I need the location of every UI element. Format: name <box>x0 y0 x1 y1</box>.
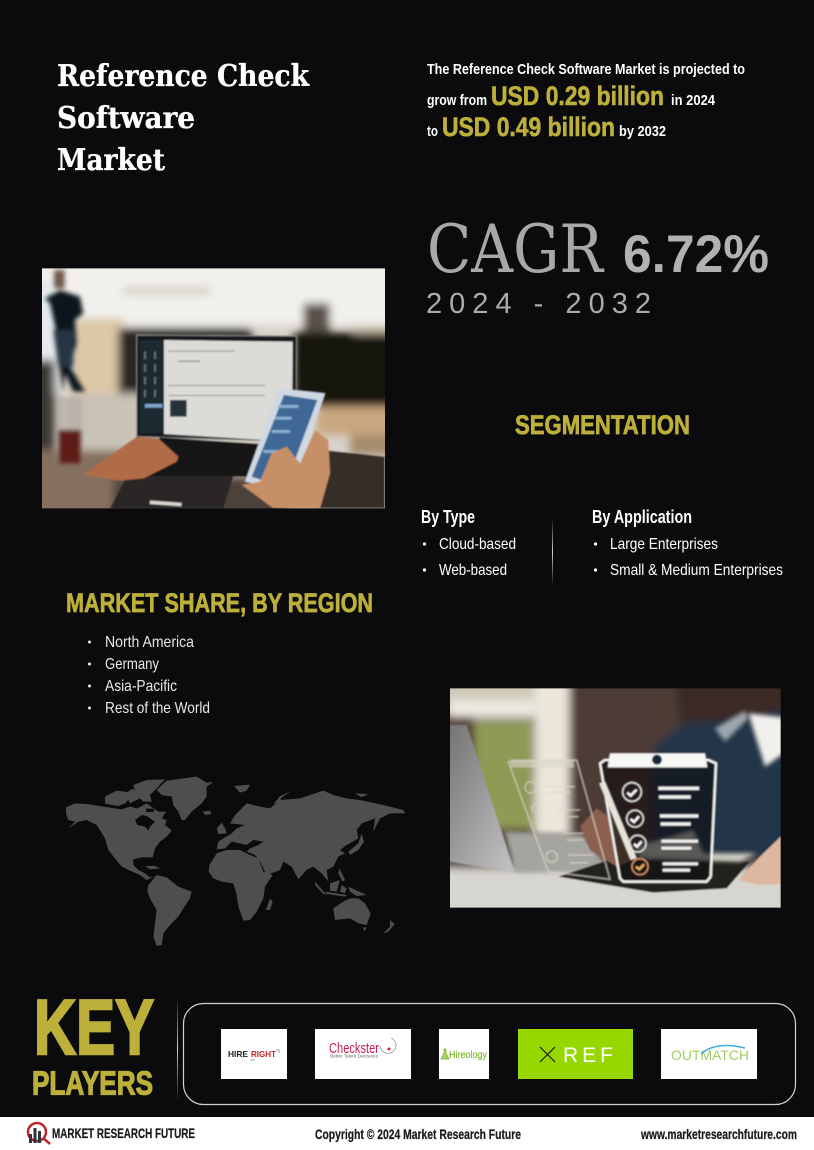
title: Market <box>57 143 165 178</box>
heading: key players: PLAYERS <box>32 1064 153 1102</box>
CAGR figure: 6.72% <box>623 225 769 284</box>
heading: segmentation: SEGMENTATION <box>515 410 690 440</box>
hand <box>580 808 633 867</box>
photo: digital checklist <box>450 688 781 908</box>
segmentation: by application: By Application <box>592 507 692 527</box>
intro text: market projection: grow from <box>427 92 487 109</box>
footer: MARKET RESEARCH FUTURE <box>52 1125 195 1141</box>
footer <box>0 1117 814 1150</box>
tablet under <box>558 858 750 893</box>
world map <box>66 777 405 946</box>
region list: North America <box>105 634 194 651</box>
intro text: market projection: in 2024 <box>671 92 716 109</box>
phone <box>245 388 325 488</box>
intro text: market projection: USD 0.29 billion <box>491 81 664 111</box>
CAGR figure <box>426 211 769 320</box>
logo: Checkster: Checkster <box>329 1040 379 1057</box>
segmentation: by application: Large Enterprises <box>610 536 718 553</box>
main clipboard <box>600 760 716 882</box>
title: Software <box>57 101 195 136</box>
CAGR figure: CAGR <box>427 211 605 288</box>
region list: Rest of the World <box>105 700 210 717</box>
intro text: market projection <box>427 61 745 142</box>
logo: XREF: REF <box>563 1044 613 1067</box>
segmentation: by type: Cloud-based <box>439 536 516 553</box>
laptop <box>450 724 514 871</box>
logo: HireRight: RIGHT <box>251 1049 277 1059</box>
segmentation: by application <box>592 507 783 579</box>
intro text: market projection: The Reference Check Software Market is projected to <box>427 61 745 78</box>
logo: Outmatch: OUTMATCH <box>671 1047 749 1063</box>
person <box>45 270 85 463</box>
title <box>57 59 310 178</box>
hand left <box>83 437 178 481</box>
footer: Copyright © 2024 Market Research Future <box>315 1126 521 1142</box>
region list: Germany <box>105 656 159 673</box>
logo: Hireology: Hireology <box>449 1049 488 1061</box>
laptop <box>137 335 297 442</box>
intro text: market projection: by 2032 <box>619 123 666 140</box>
logo: Outmatch <box>661 1029 757 1079</box>
CAGR figure: 2024 - 2032 <box>426 288 651 320</box>
region list <box>88 634 210 717</box>
logo: HireRight <box>221 1029 287 1079</box>
heading: key players: KEY <box>34 983 154 1071</box>
intro text: market projection: to <box>427 123 438 140</box>
segmentation: by type <box>421 507 516 579</box>
logo: Checkster: Better Talent Decisions <box>330 1054 379 1058</box>
logo: Checkster <box>315 1029 411 1079</box>
logo: HireRight: HIRE <box>228 1049 248 1059</box>
heading: key players <box>32 983 154 1102</box>
segmentation: by type: By Type <box>421 507 475 527</box>
icon: market research future logo <box>28 1123 50 1144</box>
photo: laptop and phone <box>42 268 385 508</box>
panel: key player logos <box>184 1004 796 1104</box>
logo: Hireology <box>439 1029 489 1079</box>
hand right <box>242 430 330 508</box>
region list: Asia-Pacific <box>105 678 177 695</box>
ghost clipboard <box>508 760 610 879</box>
segmentation: by application: Small & Medium Enterprises <box>610 562 783 579</box>
title: Reference Check <box>57 59 310 94</box>
intro text: market projection: USD 0.49 billion <box>442 112 615 142</box>
logo: XREF <box>518 1029 633 1079</box>
heading: market share by region: MARKET SHARE, BY REGION <box>66 588 373 618</box>
segmentation: by type: Web-based <box>439 562 507 579</box>
